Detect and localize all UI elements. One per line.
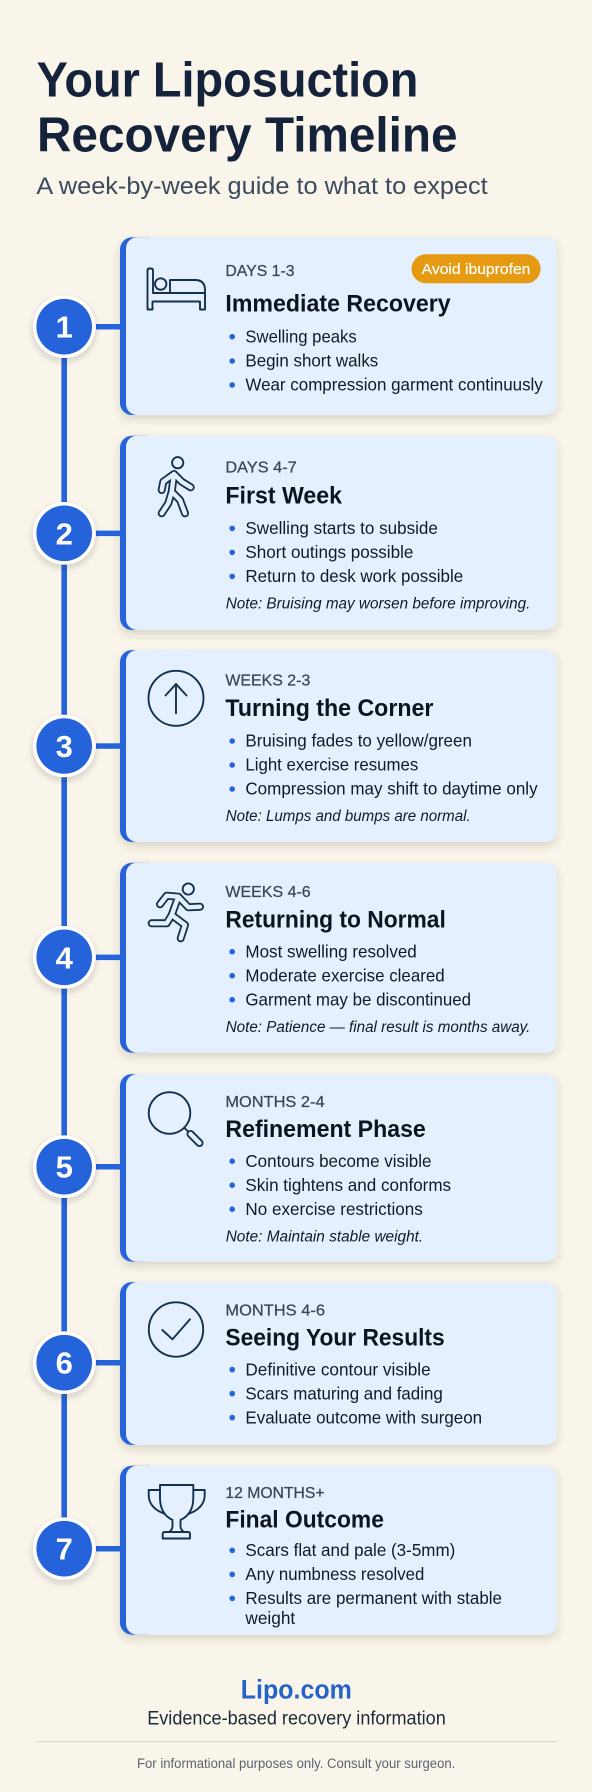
time label: WEEKS 4-6 bbox=[225, 884, 311, 901]
panel: step 3 bbox=[33, 650, 557, 842]
bullet list: Return to desk work possible bbox=[245, 566, 463, 586]
step number 6 bbox=[33, 1331, 122, 1394]
bullet list bbox=[229, 518, 463, 586]
time label: DAYS 4-7 bbox=[225, 460, 297, 477]
step number 7: 7 bbox=[56, 1532, 73, 1567]
time label: WEEKS 2-3 bbox=[225, 673, 310, 690]
bullet list bbox=[229, 1540, 502, 1628]
time label: DAYS 1-3 bbox=[225, 263, 295, 280]
disclaimer: For informational purposes only. Consult your surgeon. bbox=[137, 1756, 455, 1771]
card background bbox=[120, 1282, 557, 1445]
panel: step 2 bbox=[33, 436, 557, 630]
bullet list: Any numbness resolved bbox=[245, 1564, 424, 1584]
step number 3 bbox=[33, 715, 122, 777]
card title: Seeing Your Results bbox=[225, 1324, 445, 1351]
step number 5 bbox=[33, 1135, 122, 1198]
title bbox=[37, 54, 457, 163]
warning pill: Avoid ibuprofen bbox=[422, 261, 530, 278]
bullet list bbox=[229, 941, 471, 1009]
card title: Returning to Normal bbox=[225, 906, 446, 933]
icon: trophy bbox=[149, 1485, 205, 1538]
footer brand: Lipo.com bbox=[241, 1675, 352, 1705]
title: Your Liposuction bbox=[37, 54, 418, 108]
step number 2 bbox=[33, 502, 122, 565]
step number 4: 4 bbox=[56, 940, 74, 975]
bullet list: Garment may be discontinued bbox=[245, 989, 471, 1009]
bullet list: Skin tightens and conforms bbox=[245, 1175, 451, 1195]
footer tagline: Evidence-based recovery information bbox=[147, 1709, 446, 1730]
bullet list: Scars maturing and fading bbox=[245, 1383, 443, 1403]
card background bbox=[120, 237, 557, 415]
bullet list: Most swelling resolved bbox=[245, 941, 417, 961]
step number 5: 5 bbox=[56, 1150, 73, 1185]
card title: Turning the Corner bbox=[225, 695, 433, 722]
subtitle: A week-by-week guide to what to expect bbox=[36, 173, 488, 200]
step number 4 bbox=[33, 926, 122, 989]
timeline spine bbox=[61, 327, 67, 1549]
bullet list: weight bbox=[244, 1608, 295, 1628]
bullet list: Definitive contour visible bbox=[245, 1359, 431, 1379]
bullet list: Light exercise resumes bbox=[245, 755, 419, 775]
icon: running person bbox=[152, 883, 200, 938]
icon: check in circle bbox=[149, 1302, 203, 1357]
bullet list: Bruising fades to yellow/green bbox=[245, 731, 472, 751]
card title: Refinement Phase bbox=[225, 1116, 426, 1143]
note: Note: Bruising may worsen before improving. bbox=[226, 595, 530, 612]
note: Note: Maintain stable weight. bbox=[226, 1229, 423, 1246]
card title: Immediate Recovery bbox=[225, 291, 451, 318]
icon: up arrow in circle bbox=[148, 671, 204, 726]
step number 1: 1 bbox=[56, 310, 73, 345]
note: Note: Lumps and bumps are normal. bbox=[226, 808, 471, 825]
card background bbox=[120, 650, 557, 842]
bullet list: Short outings possible bbox=[245, 542, 413, 562]
bullet list bbox=[229, 1359, 482, 1427]
warning pill bbox=[412, 254, 541, 283]
step number 2: 2 bbox=[56, 516, 73, 551]
icon: walking person bbox=[162, 457, 191, 513]
note: Note: Patience — final result is months away. bbox=[226, 1019, 530, 1036]
time label: 12 MONTHS+ bbox=[225, 1485, 325, 1502]
bullet list bbox=[229, 1151, 451, 1219]
card title: Final Outcome bbox=[225, 1506, 384, 1533]
bullet list: Contours become visible bbox=[245, 1151, 432, 1171]
icon: bed bbox=[148, 268, 205, 310]
panel: step 6 bbox=[33, 1282, 557, 1445]
bullet list: No exercise restrictions bbox=[245, 1199, 423, 1219]
time label: MONTHS 4-6 bbox=[225, 1302, 325, 1319]
bullet list: Results are permanent with stable bbox=[245, 1588, 502, 1608]
card background bbox=[120, 1466, 557, 1635]
icon: magnifying glass bbox=[149, 1092, 200, 1143]
bullet list: Evaluate outcome with surgeon bbox=[245, 1407, 482, 1427]
card title: First Week bbox=[225, 482, 343, 509]
time label: MONTHS 2-4 bbox=[225, 1094, 325, 1111]
step number 3: 3 bbox=[56, 729, 73, 764]
card background bbox=[120, 1074, 557, 1262]
step number 7 bbox=[33, 1517, 122, 1580]
title: Recovery Timeline bbox=[37, 109, 458, 163]
card background bbox=[120, 863, 557, 1053]
panel: step 1 bbox=[33, 237, 557, 415]
step number 1 bbox=[33, 295, 122, 358]
bullet list bbox=[229, 326, 543, 395]
bullet list: Begin short walks bbox=[245, 350, 379, 370]
bullet list: Swelling peaks bbox=[245, 326, 357, 346]
step number 6: 6 bbox=[56, 1346, 73, 1381]
panel: step 4 bbox=[33, 863, 557, 1053]
panel: step 7 bbox=[33, 1466, 557, 1635]
bullet list: Moderate exercise cleared bbox=[245, 965, 445, 985]
bullet list bbox=[229, 731, 538, 799]
bullet list: Scars flat and pale (3-5mm) bbox=[245, 1540, 455, 1560]
card background bbox=[120, 436, 557, 630]
bullet list: Swelling starts to subside bbox=[245, 518, 438, 538]
bullet list: Compression may shift to daytime only bbox=[245, 779, 538, 799]
panel: step 5 bbox=[33, 1074, 557, 1262]
bullet list: Wear compression garment continuusly bbox=[245, 375, 543, 395]
